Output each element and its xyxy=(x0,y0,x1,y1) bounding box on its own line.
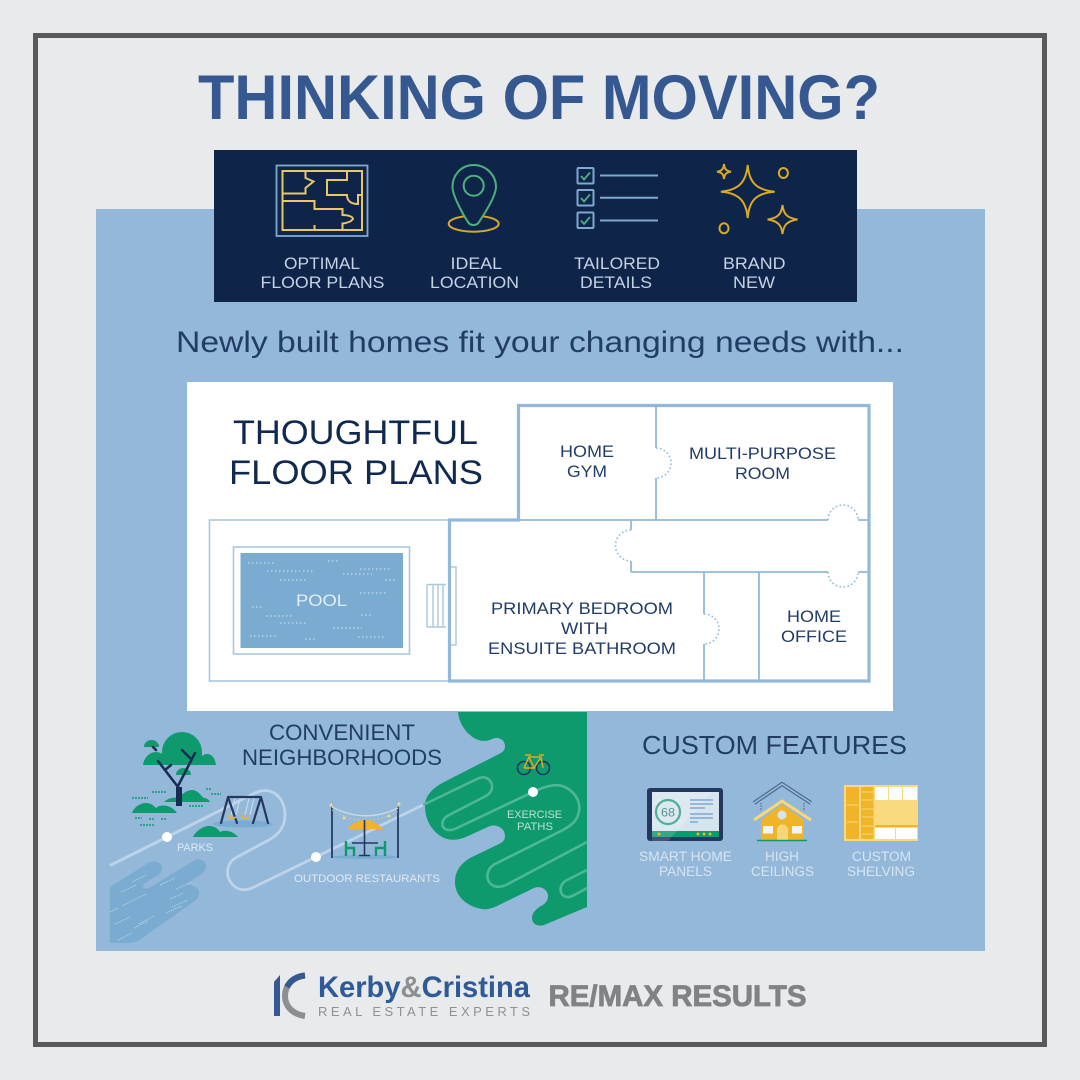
labels: neighborhood stops: OUTDOOR RESTAURANTS xyxy=(294,873,440,885)
heading: thoughtful floor plans: THOUGHTFUL xyxy=(233,414,478,452)
panel: four benefits band xyxy=(214,150,857,302)
icon: smart home panel: 68 xyxy=(661,808,675,820)
heading: convenient neighborhoods: NEIGHBORHOODS xyxy=(242,745,442,770)
icon: smart home panel xyxy=(647,788,723,841)
labels: neighborhood stops xyxy=(177,842,440,885)
labels: custom features xyxy=(639,849,915,879)
pool area: POOL xyxy=(296,591,347,610)
labels: custom features: HIGH xyxy=(765,849,799,864)
location markers xyxy=(162,787,538,862)
labels: custom features: SHELVING xyxy=(847,864,915,879)
icon: tree and bushes xyxy=(132,732,238,837)
labels: benefits xyxy=(260,255,786,292)
labels: benefits: IDEAL xyxy=(450,255,502,273)
labels: custom features: CEILINGS xyxy=(751,864,814,879)
exercise path xyxy=(423,777,587,897)
label: exercise paths: PATHS xyxy=(517,821,553,833)
title: THINKING OF MOVING? xyxy=(198,63,880,133)
labels: benefits: OPTIMAL xyxy=(284,255,360,273)
panel: convenient neighborhoods xyxy=(110,712,587,943)
footer logos xyxy=(274,971,806,1019)
logo tagline: REAL ESTATE EXPERTS xyxy=(318,1004,530,1019)
room labels: ROOM xyxy=(735,464,790,483)
labels: benefits: LOCATION xyxy=(430,274,519,292)
icon: sparkles xyxy=(717,164,798,234)
icon: high ceilings house xyxy=(754,784,811,840)
icon: outdoor restaurant xyxy=(330,802,400,859)
room labels: HOME xyxy=(787,607,841,626)
floor plan walls xyxy=(450,405,869,681)
green blob xyxy=(425,712,587,926)
logo: Kerby & Cristina: Kerby&Cristina xyxy=(318,971,530,1004)
heading: thoughtful floor plans xyxy=(229,414,483,492)
pool area xyxy=(210,520,456,681)
labels: neighborhood stops: PARKS xyxy=(177,842,213,854)
icon: location pin xyxy=(449,165,499,232)
water blob xyxy=(110,859,206,943)
label: exercise paths xyxy=(507,809,562,833)
logo: IC mark xyxy=(274,975,305,1016)
labels: benefits: BRAND xyxy=(723,255,786,273)
panel: custom features xyxy=(639,730,918,879)
room labels: ENSUITE BATHROOM xyxy=(488,639,676,658)
heading: thoughtful floor plans: FLOOR PLANS xyxy=(229,454,483,492)
labels: benefits: NEW xyxy=(733,274,775,292)
heading: convenient neighborhoods: CONVENIENT xyxy=(269,720,415,745)
heading: convenient neighborhoods xyxy=(242,720,442,770)
labels: benefits: TAILORED xyxy=(574,255,660,273)
labels: benefits: FLOOR PLANS xyxy=(260,274,384,292)
room labels: WITH xyxy=(561,619,608,638)
room labels: HOME xyxy=(560,442,614,461)
room labels: PRIMARY BEDROOM xyxy=(491,599,673,618)
icon: bicycle xyxy=(518,755,550,774)
icon: checklist xyxy=(578,168,658,228)
room labels: MULTI-PURPOSE xyxy=(689,444,836,463)
panel: thoughtful floor plans xyxy=(187,382,893,711)
logo: RE/MAX Results: RE/MAX RESULTS xyxy=(548,980,806,1013)
icon: floor plan xyxy=(276,166,368,236)
labels: custom features: SMART HOME xyxy=(639,849,732,864)
subheading: Newly built homes fit your changing needs with... xyxy=(176,326,904,359)
labels: custom features: PANELS xyxy=(659,864,712,879)
panel: light blue background xyxy=(96,209,985,951)
heading: custom features: CUSTOM FEATURES xyxy=(642,730,907,760)
room labels: GYM xyxy=(567,462,607,481)
label: exercise paths: EXERCISE xyxy=(507,809,562,821)
walking path xyxy=(111,791,423,890)
labels: custom features: CUSTOM xyxy=(852,849,911,864)
icon: swing set xyxy=(213,797,273,828)
room labels: OFFICE xyxy=(781,627,847,646)
labels: benefits: DETAILS xyxy=(580,274,652,292)
icon: custom shelving xyxy=(844,785,918,841)
room labels xyxy=(488,442,847,658)
